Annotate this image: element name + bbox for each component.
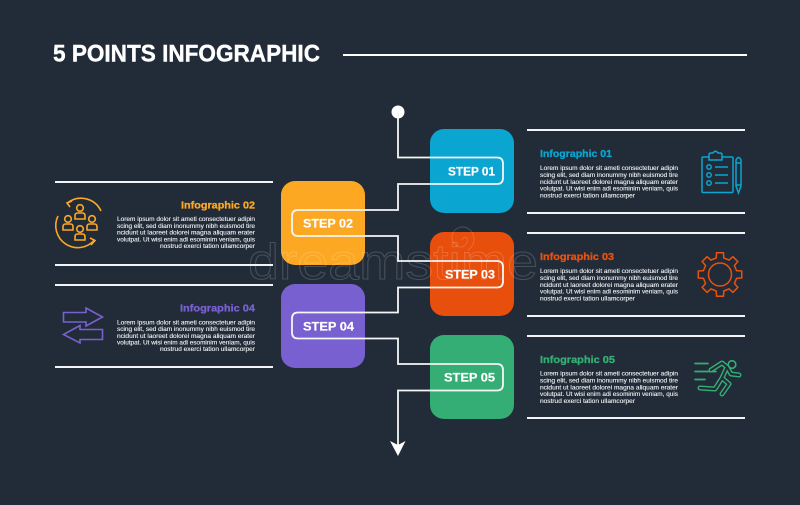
icon: people cycle: [56, 198, 101, 248]
panel: infographic 03: Infographic 03: [540, 251, 614, 263]
panel: infographic 05: scing elit, sed diam inonummy nibh euismod tire: [540, 378, 679, 384]
connector line with start dot and end arrow: [292, 106, 503, 456]
step box 05: [430, 335, 514, 419]
panel: infographic 04: ncidunt ut laoreet dolorei magna aliquam erater: [117, 334, 255, 340]
panel: infographic 03: Lorem ipsum dolor sit ameti consectetuer adipin: [540, 269, 678, 275]
panel: infographic 04: nostrud exerci tation ullamcorper: [160, 347, 255, 353]
step box 04: [281, 284, 365, 368]
panel: infographic 01: Lorem ipsum dolor sit ameti consectetuer adipin: [540, 166, 678, 172]
panel: infographic 05: volutpat. Ut wisi enim adi esominim veniam, quis: [540, 392, 678, 398]
panel: infographic 01: volutpat. Ut wisi enim adi esominim veniam, quis: [540, 186, 678, 192]
step labels: STEP 03: [445, 268, 495, 282]
title: 5 POINTS INFOGRAPHIC: [53, 40, 320, 68]
panel: infographic 05: Infographic 05: [540, 354, 615, 366]
panel: infographic 03: ncidunt ut laoreet dolorei magna aliquam erater: [540, 283, 678, 289]
panel: infographic 03: [527, 233, 745, 316]
panel: infographic 01: Infographic 01: [540, 148, 612, 160]
panel: infographic 02: ncidunt ut laoreet dolorei magna aliquam erater: [117, 230, 255, 236]
panel: infographic 02: nostrud exerci tation ullamcorper: [160, 244, 255, 250]
panel: infographic 02: Infographic 02: [181, 200, 255, 212]
step box 01: [430, 129, 514, 213]
step labels: STEP 02: [303, 216, 353, 230]
panel: infographic 04: Infographic 04: [180, 302, 255, 314]
step labels: STEP 01: [448, 164, 495, 178]
panel: infographic 05: Lorem ipsum dolor sit ameti consectetuer adipin: [540, 372, 678, 378]
step labels: STEP 05: [444, 370, 495, 384]
step box 02: [281, 181, 365, 265]
panel: infographic 02: scing elit, sed diam inonummy nibh euismod tire: [117, 224, 256, 230]
icon: runner: [695, 361, 739, 394]
icon: clipboard and pencil: [702, 151, 741, 193]
panel: infographic 05: [527, 336, 745, 418]
icon: exchange arrows: [64, 308, 102, 343]
panel: infographic 03: scing elit, sed diam inonummy nibh euismod tire: [540, 276, 679, 282]
panel: infographic 04: Lorem ipsum dolor sit ameti consectetuer adipin: [117, 320, 255, 326]
panel: infographic 03: volutpat. Ut wisi enim adi esominim veniam, quis: [540, 290, 678, 296]
panel: infographic 01: [527, 130, 745, 213]
step labels: [303, 164, 495, 384]
icon: gear: [698, 253, 742, 296]
panel: infographic 01: scing elit, sed diam inonummy nibh euismod tire: [540, 173, 679, 179]
panel: infographic 05: nostrud exerci tation ullamcorper: [540, 399, 635, 405]
panel: infographic 02: Lorem ipsum dolor sit ameti consectetuer adipin: [117, 217, 255, 223]
panel: infographic 04: scing elit, sed diam inonummy nibh euismod tire: [117, 327, 256, 333]
step labels: STEP 04: [303, 320, 354, 334]
panel: infographic 01: ncidunt ut laoreet dolorei magna aliquam erater: [540, 180, 678, 186]
step box 03: [430, 232, 514, 316]
panel: infographic 04: volutpat. Ut wisi enim adi esominim veniam, quis: [117, 340, 255, 346]
panel: infographic 04: [55, 285, 273, 367]
panel: infographic 01: nostrud exerci tation ullamcorper: [540, 194, 635, 200]
panel: infographic 02: [55, 182, 273, 265]
watermark: dreamstime: [248, 234, 538, 290]
panel: infographic 05: ncidunt ut laoreet dolorei magna aliquam erater: [540, 386, 678, 392]
panel: infographic 02: volutpat. Ut wisi enim adi esominim veniam, quis: [117, 238, 255, 244]
panel: infographic 03: nostrud exerci tation ullamcorper: [540, 296, 635, 302]
